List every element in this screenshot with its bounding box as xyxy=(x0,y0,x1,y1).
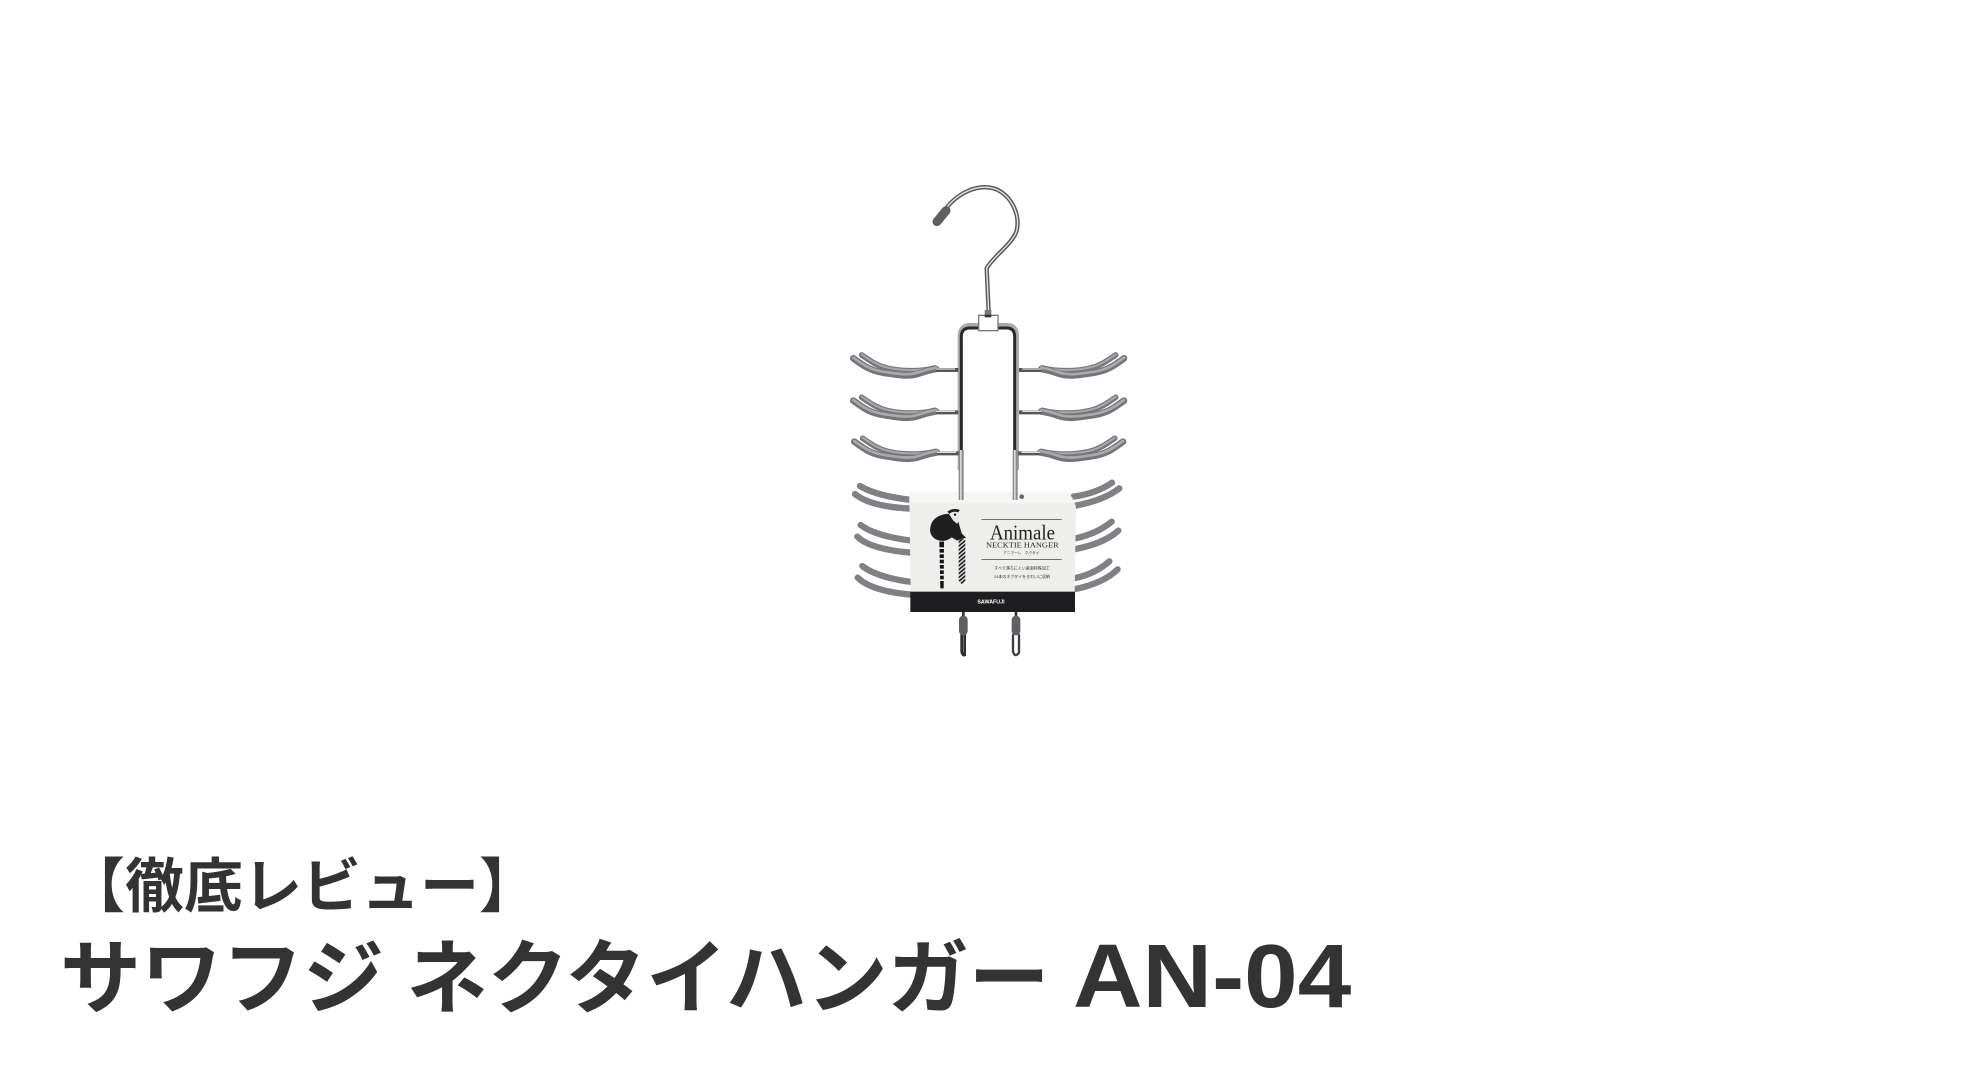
left arms, rows 1 to 3 xyxy=(853,354,959,459)
card title text: すべり落ちにくい裏面特殊加工 xyxy=(994,565,1050,571)
heading: product name xyxy=(60,927,1351,1027)
hook xyxy=(937,187,1018,312)
upper part of hanger: hook, frame and arms xyxy=(853,187,1124,470)
frame section above card xyxy=(959,450,1024,500)
card title text: Animale xyxy=(990,522,1055,544)
card band with brand: SAWAFUJI xyxy=(977,600,1005,606)
card title text xyxy=(981,519,1062,579)
card title text: 24本のネクタイをきれいに収納 xyxy=(994,573,1050,579)
packaging card xyxy=(909,492,1076,612)
lower part of hanger: arms, hooks and packaging card xyxy=(855,450,1119,655)
card title text: アニマーレ ネクタイ xyxy=(1003,550,1040,555)
model number: AN-04 xyxy=(1073,927,1351,1027)
card title text: NECKTIE HANGER xyxy=(986,540,1060,549)
frame xyxy=(960,310,1017,470)
lower arms xyxy=(855,483,1119,595)
heading: review label: 【徹底レビュー】 xyxy=(66,854,538,920)
heading: product name: サワフジ ネクタイハンガー xyxy=(60,935,1050,1025)
bottom hooks xyxy=(962,612,1019,655)
card band with brand xyxy=(910,592,1075,612)
lemur illustration xyxy=(930,509,966,588)
right arms, rows 1 to 3 xyxy=(1018,354,1124,459)
